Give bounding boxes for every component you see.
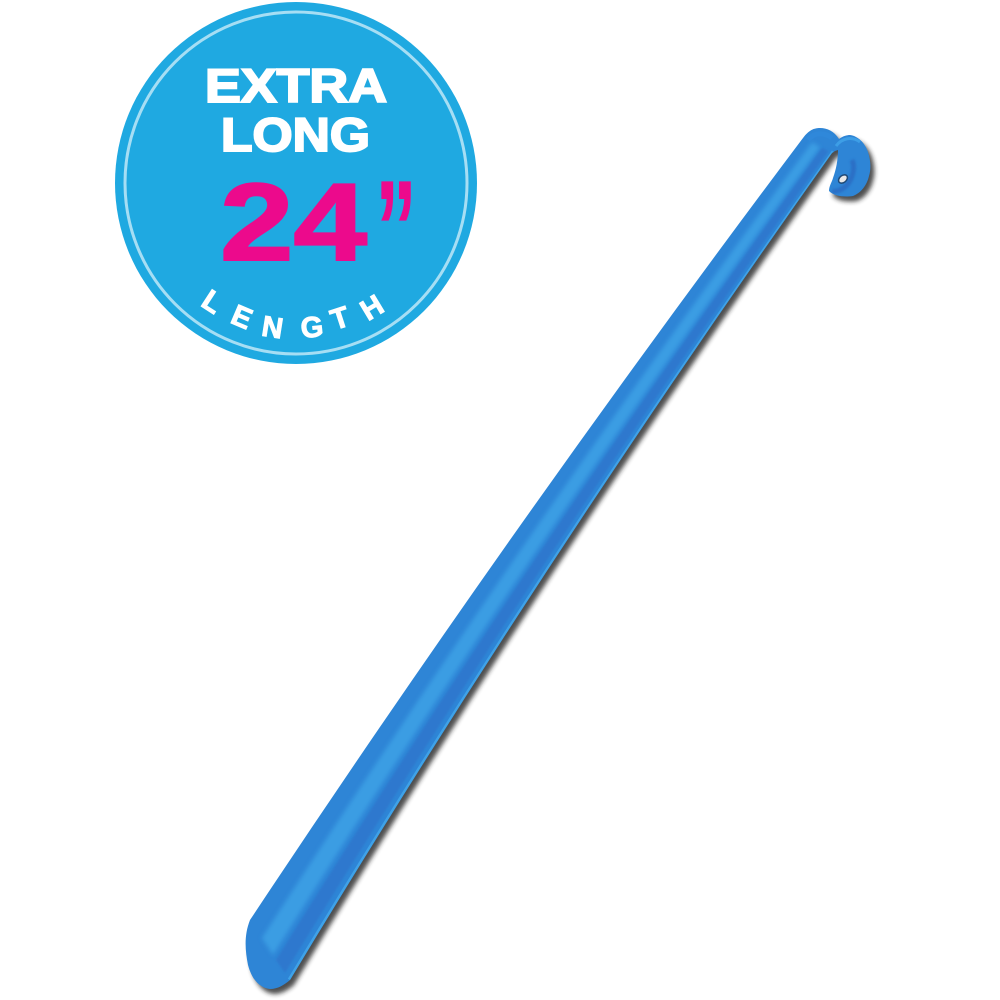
hook inner shade xyxy=(832,160,854,191)
curved label: length: E xyxy=(226,299,257,336)
curved label: length: L xyxy=(196,284,228,321)
product: blue shoe horn xyxy=(230,110,890,1000)
darker inner band xyxy=(276,148,828,973)
heading: extra: EXTRA xyxy=(205,59,387,112)
curved label: length: H xyxy=(355,289,390,327)
curved label: length xyxy=(196,284,390,346)
right rim highlight xyxy=(290,152,834,980)
inch mark: ” xyxy=(375,152,417,307)
hang hole xyxy=(837,173,849,185)
shoe horn body xyxy=(230,110,890,1000)
shoe horn drop shadow xyxy=(250,133,874,994)
heading: long: LONG xyxy=(221,108,370,161)
curved label: length: G xyxy=(299,311,325,345)
curved label: length: N xyxy=(260,311,285,346)
badge: extra long 24 inch length xyxy=(115,2,477,364)
number: 24: 24 xyxy=(220,161,367,284)
curved label: length: T xyxy=(327,301,354,337)
handle top tone xyxy=(808,134,832,140)
badge inner ring xyxy=(125,12,467,354)
badge circle xyxy=(115,2,477,364)
hook edge highlight xyxy=(836,139,860,146)
centre highlight stripe xyxy=(262,142,820,955)
